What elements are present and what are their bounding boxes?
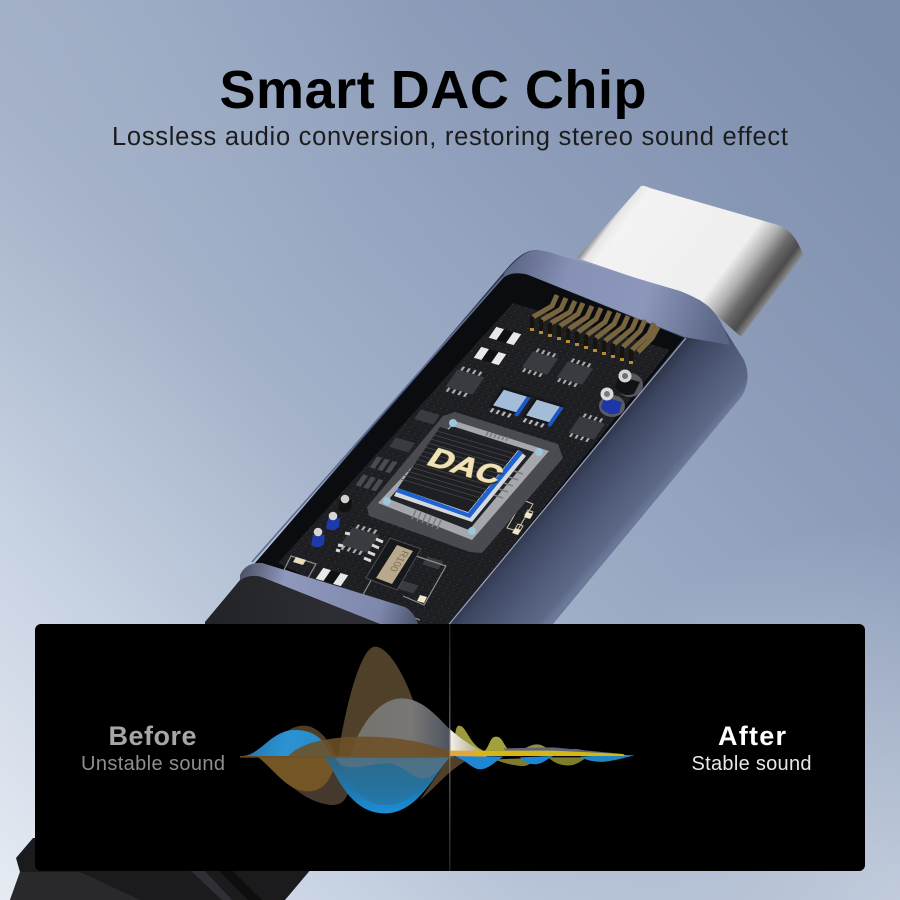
divider line xyxy=(448,624,451,871)
bottom metal bar xyxy=(240,563,418,624)
components xyxy=(284,327,608,620)
metal body xyxy=(205,250,748,630)
DAC label: DAC xyxy=(421,444,509,490)
title: Smart DAC Chip xyxy=(220,60,646,120)
connector pins xyxy=(532,295,658,364)
after heading: After xyxy=(718,721,786,751)
interior window wall xyxy=(255,273,684,630)
before caption: Unstable sound xyxy=(81,753,225,775)
chip top xyxy=(398,427,518,512)
IC legs near R100 xyxy=(336,533,383,561)
after caption: Stable sound xyxy=(692,753,812,775)
chip pins xyxy=(412,432,523,529)
circuit board xyxy=(278,303,670,630)
cable below panel xyxy=(10,838,312,900)
subtitle: Lossless audio conversion, restoring stereo sound effect xyxy=(112,123,788,151)
chip top ridges xyxy=(401,431,515,502)
comparison panel xyxy=(35,624,865,871)
black section xyxy=(205,576,380,626)
R100 resistor xyxy=(366,538,421,590)
capacitors xyxy=(311,370,643,547)
top lip xyxy=(502,250,730,345)
right inner edge highlight xyxy=(446,338,686,628)
USB-C plug xyxy=(577,186,803,337)
outer plate xyxy=(367,412,563,553)
before waves xyxy=(240,647,468,813)
chip side xyxy=(394,450,526,522)
adapter housing xyxy=(205,250,748,630)
left rim xyxy=(252,277,503,562)
inner plate xyxy=(378,421,549,540)
corner screws xyxy=(383,419,543,535)
after waves xyxy=(450,726,635,769)
R100 resistor: R100 xyxy=(386,549,410,573)
blue edge xyxy=(396,450,523,518)
sound waveform xyxy=(240,624,635,871)
DAC chip xyxy=(367,412,563,553)
chip recess xyxy=(389,426,534,530)
before heading: Before xyxy=(108,721,196,751)
